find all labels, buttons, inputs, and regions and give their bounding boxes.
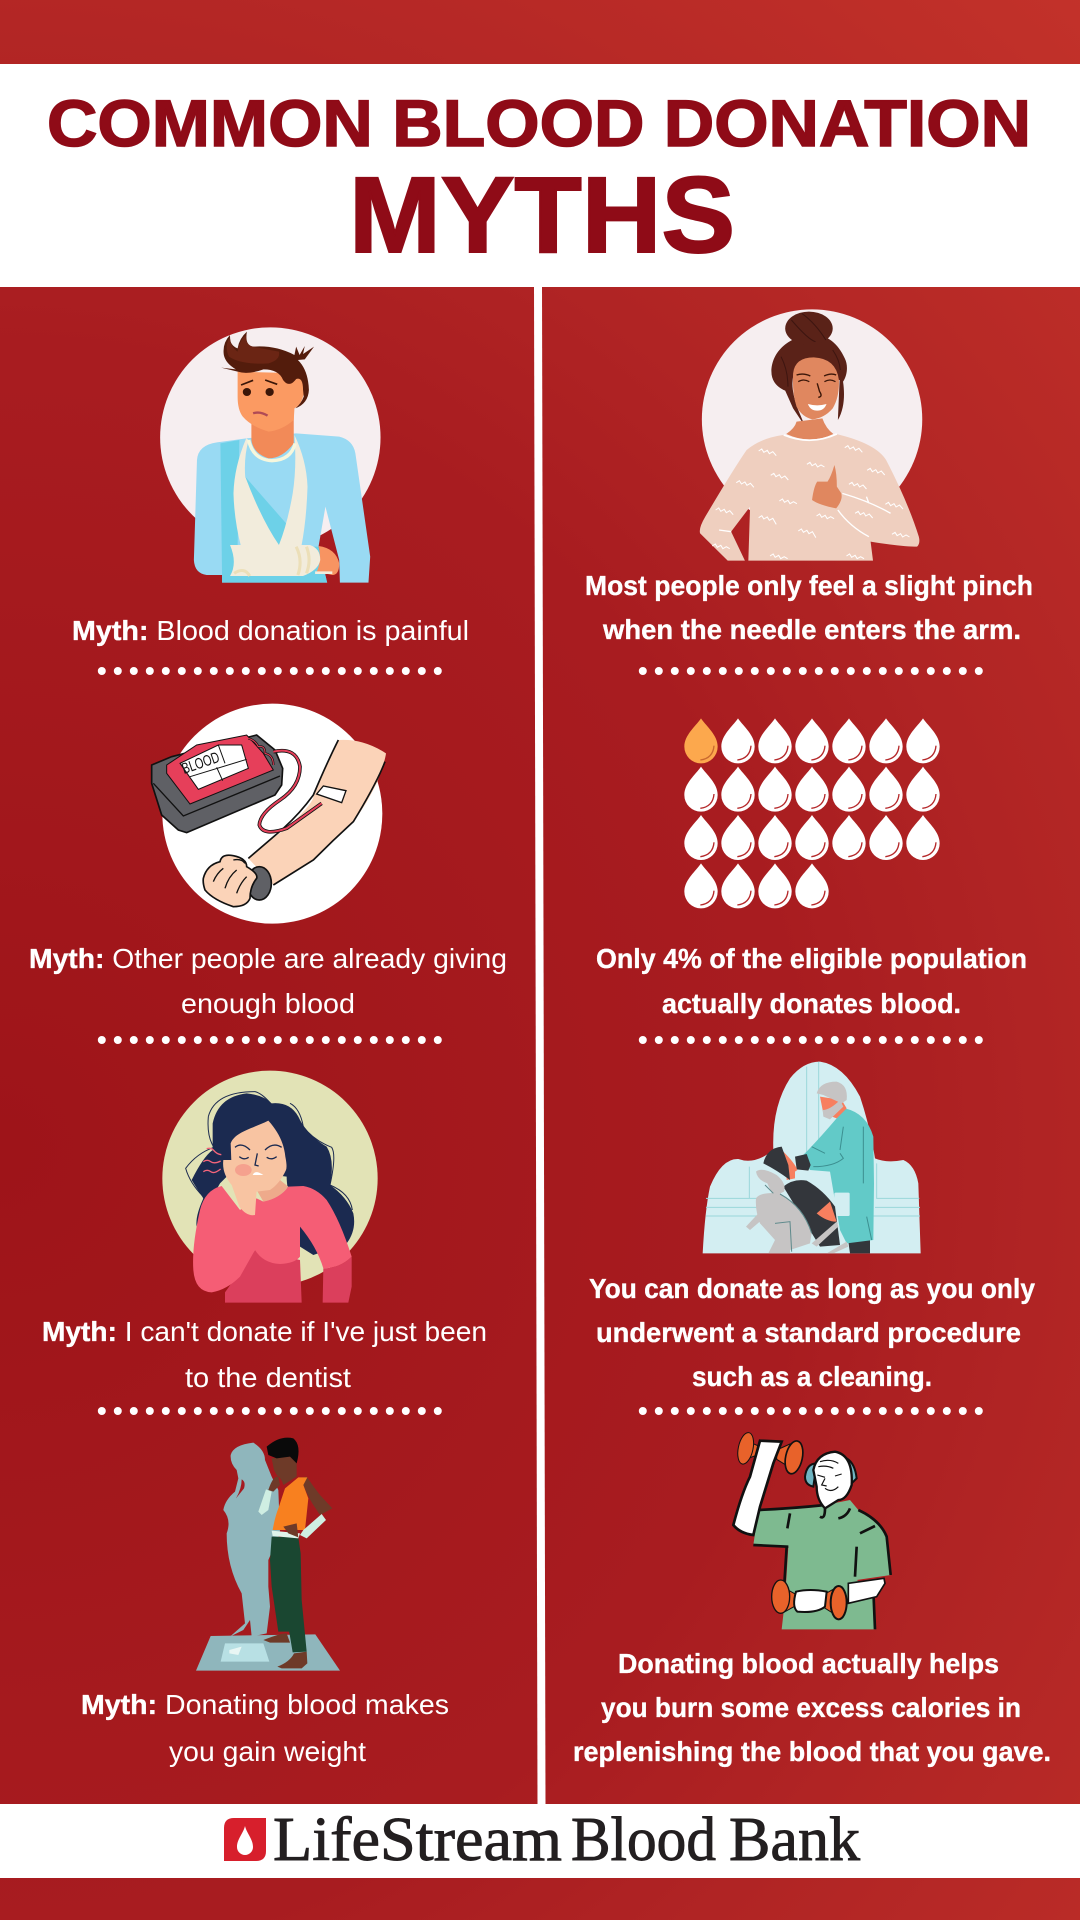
dotted separator left 3	[102, 1407, 438, 1415]
text: fact dentist	[589, 1273, 1035, 1392]
illustration: smiling woman thumbs up	[700, 309, 922, 561]
dotted separator left 1	[102, 667, 438, 675]
logo wordmark: LifeStream	[273, 1806, 562, 1874]
text: fact 4 percent: Only 4% of the eligible population	[596, 943, 1027, 974]
dotted separator right 1	[643, 667, 979, 675]
title: common blood donation: COMMON BLOOD DONATION	[47, 86, 1031, 160]
illustration: blood bag and arm	[152, 704, 386, 924]
text: myth weight	[81, 1689, 449, 1767]
dotted separator left 2	[102, 1036, 438, 1044]
text: myth dentist: Myth: I can't donate if I've just been	[42, 1316, 487, 1347]
illustration: dentist and patient	[703, 1062, 921, 1253]
text: fact pinch: when the needle enters the arm.	[602, 614, 1021, 645]
text: fact dentist: underwent a standard procedure	[596, 1317, 1021, 1348]
footer logo band	[0, 1804, 1080, 1878]
logo wordmark: Bank	[729, 1806, 860, 1874]
text: fact dentist: such as a cleaning.	[692, 1361, 932, 1392]
text: fact calories: replenishing the blood that you gave.	[573, 1736, 1051, 1767]
text: myth other people: Myth: Other people are already giving	[29, 943, 507, 974]
text: myth other people	[29, 943, 507, 1019]
icon: logo drop	[224, 1818, 266, 1861]
illustration: woman on scale with shadow	[196, 1438, 340, 1671]
title: myths: MYTHS	[349, 154, 735, 275]
text: fact 4 percent	[596, 943, 1027, 1019]
text: fact dentist: You can donate as long as you only	[589, 1273, 1035, 1304]
label: blood: BLOOD	[180, 749, 222, 778]
illustration: older man lifting dumbbells	[733, 1431, 891, 1629]
pictogram: 25 blood drops, one highlighted	[684, 718, 940, 908]
dotted separator right 3	[643, 1407, 979, 1415]
text: fact calories	[573, 1648, 1051, 1767]
logo wordmark: Blood	[571, 1806, 716, 1874]
text: myth weight: Myth: Donating blood makes	[81, 1689, 449, 1720]
text: myth weight: you gain weight	[169, 1736, 366, 1767]
text: fact 4 percent: actually donates blood.	[662, 988, 961, 1019]
text: myth dentist	[42, 1316, 487, 1393]
text: fact pinch	[585, 570, 1033, 645]
illustration: man with arm in sling	[160, 327, 381, 583]
column divider	[534, 287, 546, 1804]
text: fact calories: you burn some excess calories in	[601, 1692, 1021, 1723]
text: fact calories: Donating blood actually helps	[618, 1648, 999, 1679]
text: myth painful: Myth: Blood donation is painful	[72, 615, 469, 646]
header panel	[0, 64, 1080, 287]
illustration: woman with toothache	[162, 1071, 378, 1303]
logo wordmark	[273, 1806, 860, 1874]
text: myth dentist: to the dentist	[185, 1362, 351, 1393]
text: fact pinch: Most people only feel a slight pinch	[585, 570, 1033, 601]
dotted separator right 2	[643, 1036, 979, 1044]
text: myth other people: enough blood	[181, 988, 355, 1019]
